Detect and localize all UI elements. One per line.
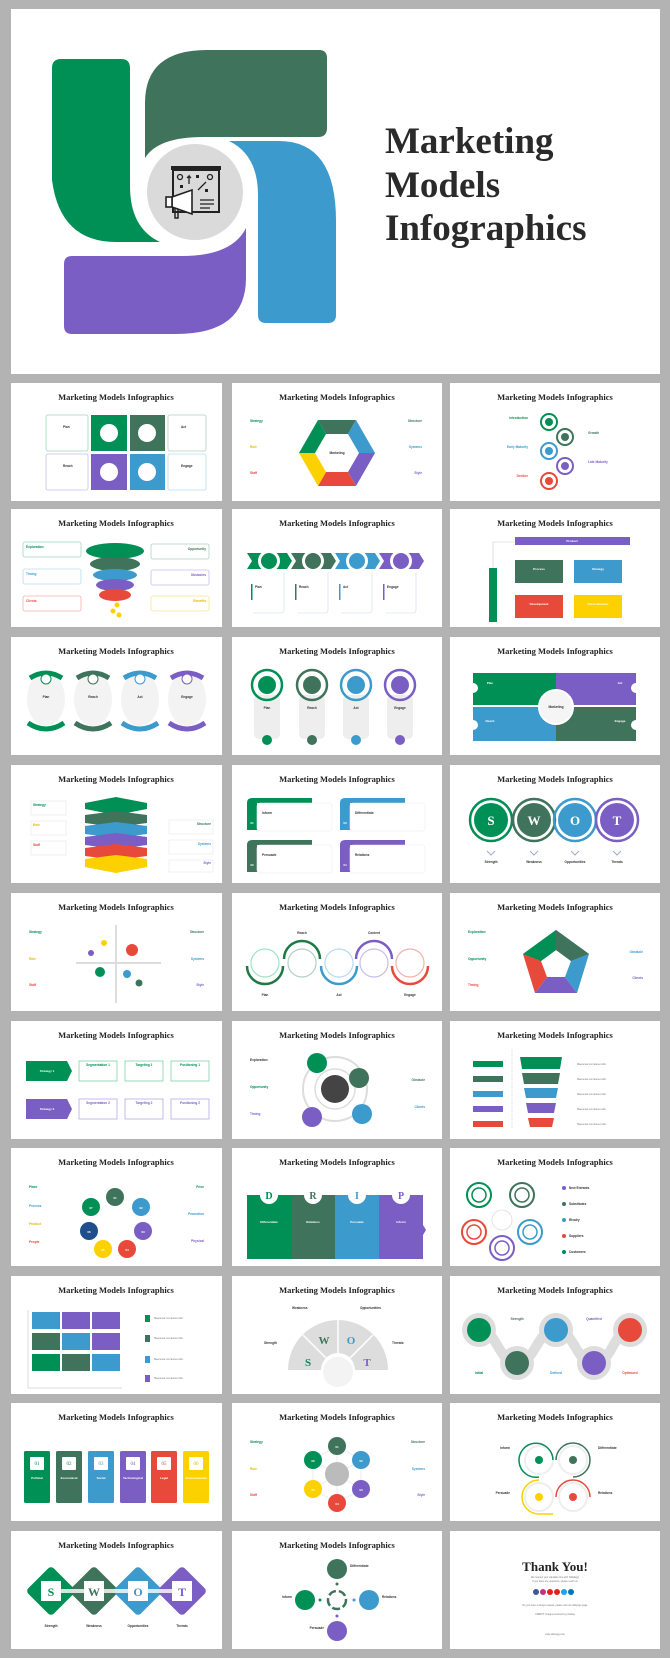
slide 22: grid matrix: Maecenas non laoreet odio. <box>154 1337 184 1340</box>
slide 4: funnel: Clients <box>26 599 37 603</box>
slide 8: circle columns: Act <box>353 706 360 710</box>
slide 26: hexagon circles: 01 <box>335 1445 339 1449</box>
slide 25: PESTLE cards: 01 <box>34 1462 40 1467</box>
slide 26: hexagon circles: Strategy <box>250 1440 263 1444</box>
slide 19: seven step cycle: 07 <box>89 1206 93 1210</box>
slide 18: funnel bars: Marketing Models Infographics <box>497 1030 614 1040</box>
slide 7: oval stages: Act <box>137 695 144 699</box>
slide 6: product matrix: Product <box>566 539 578 543</box>
slide 3: life cycle rings: Growth <box>588 431 599 435</box>
slide 7: oval stages <box>11 637 222 755</box>
slide 13: scatter quadrant: Structure <box>190 930 204 934</box>
slide 2: hexagon ring: Marketing <box>329 451 345 455</box>
slide 14: wave circles <box>232 893 442 1011</box>
slide 22: grid matrix: Marketing Models Infographics <box>58 1285 175 1295</box>
slide 9: puzzle quadrants: Reach <box>485 719 495 723</box>
slide 12: SWOT circles <box>450 765 660 883</box>
slide 12: SWOT circles: O <box>570 813 580 828</box>
slide 16: strategy flows: Marketing Models Infographics <box>58 1030 175 1040</box>
slide 17: orbit: Marketing Models Infographics <box>279 1030 396 1040</box>
slide 17: orbit: Obstacle <box>412 1078 425 1082</box>
slide 26: hexagon circles: 04 <box>335 1502 339 1506</box>
slide 25: PESTLE cards: 02 <box>66 1462 72 1467</box>
slide 7: oval stages: Plan <box>43 695 49 699</box>
slide 8: circle columns: Plan <box>264 706 270 710</box>
slide 9: puzzle quadrants <box>450 637 660 755</box>
slide 19: seven step cycle: People <box>29 1240 40 1244</box>
slide 12: SWOT circles: Threats <box>611 860 623 864</box>
slide 16: strategy flows: Positioning 1 <box>180 1063 200 1067</box>
slide 28: SWOT diamonds: Weakness <box>86 1624 102 1628</box>
slide 19: seven step cycle: 05 <box>101 1248 105 1252</box>
slide 5: chevron process: Reach <box>299 585 309 589</box>
slide 2: hexagon ring: Strategy <box>250 419 263 423</box>
slide 21: five forces rings <box>450 1148 660 1266</box>
slide 4: funnel: Marketing Models Infographics <box>58 518 175 528</box>
slide 2: hexagon ring: Role <box>250 445 257 449</box>
slide 23: SWOT half donut: S <box>305 1357 311 1369</box>
slide 1: puzzle: Plan <box>63 425 70 429</box>
slide 19: seven step cycle: Price <box>196 1185 204 1189</box>
slide 29: cross diagram <box>232 1531 442 1649</box>
slide 16: strategy flows: Strategy 2 <box>40 1107 55 1111</box>
slide 22: grid matrix: Maecenas non laoreet odio. <box>154 1317 184 1320</box>
slide 19: seven step cycle: Process <box>29 1204 42 1208</box>
slide 2: hexagon ring: Systems <box>409 445 422 449</box>
slide 18: funnel bars: Maecenas non laoreet odio. <box>577 1093 607 1096</box>
slide 28: SWOT diamonds: S <box>48 1585 55 1599</box>
slide 15: pentagon: Timing <box>468 983 478 987</box>
slide 13: scatter quadrant: Style <box>196 983 204 987</box>
slide 29: cross diagram: Marketing Models Infographics <box>279 1540 396 1550</box>
slide 30: thank you <box>450 1531 660 1649</box>
slide 17: orbit: Timing <box>250 1112 260 1116</box>
slide 28: SWOT diamonds <box>11 1531 222 1649</box>
slide 10: stacked layers: Strategy <box>33 803 46 807</box>
slide 10: stacked layers: Systems <box>198 842 211 846</box>
slide 4: funnel: Exploration <box>26 545 44 549</box>
slide 21: five forces rings: Marketing Models Infographics <box>497 1157 614 1167</box>
slide 30: thank you: If you have any questions, please reach us <box>532 1580 578 1583</box>
slide 23: SWOT half donut: Weakness <box>292 1306 308 1310</box>
slide 15: pentagon <box>450 893 660 1011</box>
slide 11: tab cards: 01 <box>250 821 254 825</box>
slide 1: puzzle: Engage <box>181 464 193 468</box>
slide 15: pentagon: Clients <box>632 976 643 980</box>
slide 11: tab cards: 04 <box>343 863 347 867</box>
slide 5: chevron process <box>232 509 442 627</box>
slide 27: four arc loops: Inform <box>500 1446 510 1450</box>
slide 27: four arc loops: Differentiate <box>598 1446 617 1450</box>
slide 11: tab cards: 02 <box>250 863 254 867</box>
slide 10: stacked layers: Staff <box>33 843 41 847</box>
slide 8: circle columns <box>232 637 442 755</box>
slide 13: scatter quadrant <box>11 893 222 1011</box>
slide 16: strategy flows <box>11 1021 222 1139</box>
slide 19: seven step cycle: 04 <box>125 1248 129 1252</box>
title: Marketing <box>385 121 554 162</box>
slide 9: puzzle quadrants: Marketing Models Infographics <box>497 646 614 656</box>
slide 24: winding path: Optimized <box>622 1371 638 1375</box>
slide 6: product matrix: Marketing Models Infographics <box>497 518 614 528</box>
slide 22: grid matrix: Maecenas non laoreet odio. <box>154 1358 184 1361</box>
slide 25: PESTLE cards <box>11 1403 222 1521</box>
slide 14: wave circles: Reach <box>297 931 307 935</box>
slide 9: puzzle quadrants: Marketing <box>548 705 564 709</box>
slide 16: strategy flows: Strategy 1 <box>40 1069 55 1073</box>
slide 20: DRIP columns: Relations <box>306 1220 320 1224</box>
slide 24: winding path: Strength <box>510 1317 524 1321</box>
slide 19: seven step cycle <box>11 1148 222 1266</box>
slide 28: SWOT diamonds: Strength <box>44 1624 58 1628</box>
slide 23: SWOT half donut: Threats <box>392 1341 404 1345</box>
slide 26: hexagon circles: 03 <box>359 1488 363 1492</box>
slide 5: chevron process: Engage <box>387 585 399 589</box>
slide 6: product matrix: Diversification <box>588 602 608 606</box>
slide 4: funnel <box>11 509 222 627</box>
slide 22: grid matrix <box>11 1276 222 1394</box>
slide 12: SWOT circles: Opportunities <box>565 860 586 864</box>
slide 30: thank you: Do you have a design request, please visit our slidesign page <box>522 1604 588 1607</box>
slide 18: funnel bars: Maecenas non laoreet odio. <box>577 1123 607 1126</box>
slide 28: SWOT diamonds: W <box>88 1585 100 1599</box>
slide 10: stacked layers: Style <box>203 861 211 865</box>
slide 23: SWOT half donut: W <box>318 1335 330 1347</box>
slide 26: hexagon circles: Staff <box>250 1493 258 1497</box>
slide 11: tab cards: Relations <box>355 853 370 857</box>
slide 3: life cycle rings <box>450 383 660 501</box>
slide 10: stacked layers: Role <box>33 823 40 827</box>
slide 19: seven step cycle: 01 <box>113 1196 117 1200</box>
slide 21: five forces rings: Suppliers <box>569 1234 584 1238</box>
slide 26: hexagon circles: Systems <box>412 1467 425 1471</box>
slide 13: scatter quadrant: Strategy <box>29 930 42 934</box>
slide 10: stacked layers: Structure <box>197 822 211 826</box>
slide 10: stacked layers: Marketing Models Infographics <box>58 774 175 784</box>
slide 19: seven step cycle: Physical <box>191 1239 204 1243</box>
slide 17: orbit: Exploration <box>250 1058 268 1062</box>
slide 15: pentagon: Obstacle <box>630 950 643 954</box>
slide 5: chevron process: Marketing Models Infographics <box>279 518 396 528</box>
slide 26: hexagon circles: Marketing Models Infographics <box>279 1412 396 1422</box>
slide 3: life cycle rings: Late Maturity <box>588 460 608 464</box>
slide 14: wave circles: Act <box>336 993 343 997</box>
slide 14: wave circles: Plan <box>262 993 268 997</box>
slide 29: cross diagram: Relations <box>382 1595 397 1599</box>
slide 12: SWOT circles: T <box>613 813 622 828</box>
slide 19: seven step cycle: 06 <box>87 1230 91 1234</box>
slide 26: hexagon circles: Style <box>417 1493 425 1497</box>
slide 20: DRIP columns: Marketing Models Infographics <box>279 1157 396 1167</box>
slide 20: DRIP columns: D <box>265 1191 273 1202</box>
slide 25: PESTLE cards: Marketing Models Infographics <box>58 1412 175 1422</box>
slide 16: strategy flows: Segmentation 2 <box>86 1101 110 1105</box>
slide 2: hexagon ring: Marketing Models Infographics <box>279 392 396 402</box>
slide 24: winding path <box>450 1276 660 1394</box>
slide 3: life cycle rings: Early Maturity <box>507 445 528 449</box>
slide 5: chevron process: Plan <box>255 585 262 589</box>
slide 19: seven step cycle: Product <box>29 1222 42 1226</box>
slide 21: five forces rings: New Entrants <box>569 1186 590 1190</box>
slide 18: funnel bars <box>450 1021 660 1139</box>
slide 2: hexagon ring: Structure <box>408 419 422 423</box>
slide 11: tab cards: 03 <box>343 821 347 825</box>
panel: cover slide <box>11 9 660 374</box>
slide 3: life cycle rings: Introduction <box>509 416 528 420</box>
slide 29: cross diagram: Inform <box>282 1595 292 1599</box>
slide 11: tab cards: Persuade <box>262 853 277 857</box>
slide 1: puzzle: Marketing Models Infographics <box>58 392 175 402</box>
slide 25: PESTLE cards: 05 <box>162 1462 167 1467</box>
slide 21: five forces rings: Rivalry <box>569 1218 580 1222</box>
slide 2: hexagon ring: Staff <box>250 471 258 475</box>
slide 23: SWOT half donut: O <box>347 1335 356 1347</box>
slide 19: seven step cycle: Marketing Models Infographics <box>58 1157 175 1167</box>
slide 11: tab cards: Inform <box>262 811 272 815</box>
panel: cover slide: Models <box>385 165 500 206</box>
slide 27: four arc loops <box>450 1403 660 1521</box>
slide 25: PESTLE cards: Legal <box>160 1476 168 1480</box>
slide 22: grid matrix: Maecenas non laoreet odio. <box>154 1377 184 1380</box>
slide 4: funnel: Benefits <box>193 599 206 603</box>
slide 12: SWOT circles: Marketing Models Infographics <box>497 774 614 784</box>
slide 29: cross diagram: Persuade <box>310 1626 324 1630</box>
slide 11: tab cards <box>232 765 442 883</box>
slide 25: PESTLE cards: Technological <box>123 1476 143 1480</box>
slide 28: SWOT diamonds: Threats <box>176 1624 188 1628</box>
slide 14: wave circles: Marketing Models Infographics <box>279 902 396 912</box>
slide 25: PESTLE cards: Economical <box>61 1476 78 1480</box>
slide 19: seven step cycle: Promotion <box>188 1212 204 1216</box>
slide 10: stacked layers <box>11 765 222 883</box>
slide 3: life cycle rings: Marketing Models Infographics <box>497 392 614 402</box>
slide 20: DRIP columns: Inform <box>396 1220 406 1224</box>
slide 21: five forces rings: Customers <box>569 1250 586 1254</box>
slide 24: winding path: Defined <box>550 1371 562 1375</box>
slide 20: DRIP columns: Differentiate <box>260 1220 278 1224</box>
slide 29: cross diagram: Differentiate <box>350 1564 369 1568</box>
slide 12: SWOT circles: Weakness <box>526 860 542 864</box>
slide 26: hexagon circles <box>232 1403 442 1521</box>
slide 20: DRIP columns: I <box>355 1191 359 1202</box>
slide 26: hexagon circles: Structure <box>411 1440 425 1444</box>
slide 3: life cycle rings: Decline <box>517 474 528 478</box>
slide 27: four arc loops: Persuade <box>496 1491 510 1495</box>
slide 30: thank you: Thank You! <box>522 1559 588 1574</box>
slide 6: product matrix: Process <box>533 567 545 571</box>
slide 25: PESTLE cards: Environmental <box>186 1476 207 1480</box>
slide 28: SWOT diamonds: Opportunities <box>128 1624 149 1628</box>
slide 26: hexagon circles: Role <box>250 1467 257 1471</box>
slide 27: four arc loops: Relations <box>598 1491 613 1495</box>
logo: four colored leaves <box>52 50 336 334</box>
slide 4: funnel: Obstacles <box>191 573 206 577</box>
slide 23: SWOT half donut: Opportunities <box>360 1306 381 1310</box>
slide 4: funnel: Opportunity <box>188 547 206 551</box>
slide 11: tab cards: Marketing Models Infographics <box>279 774 396 784</box>
slide 17: orbit <box>232 1021 442 1139</box>
slide 15: pentagon: Exploration <box>468 930 486 934</box>
slide 23: SWOT half donut: Strength <box>264 1341 277 1345</box>
slide 28: SWOT diamonds: O <box>133 1585 143 1599</box>
slide 6: product matrix <box>450 509 660 627</box>
slide 19: seven step cycle: 02 <box>139 1206 143 1210</box>
slide 15: pentagon: Opportunity <box>468 957 486 961</box>
slide 18: funnel bars: Maecenas non laoreet odio. <box>577 1063 607 1066</box>
slide 24: winding path: Initial <box>475 1371 483 1375</box>
slide 9: puzzle quadrants: Plan <box>487 681 493 685</box>
slide 7: oval stages: Engage <box>181 695 193 699</box>
slide 15: pentagon: Marketing Models Infographics <box>497 902 614 912</box>
slide 6: product matrix: Development <box>530 602 548 606</box>
slide 25: PESTLE cards: Political <box>31 1476 43 1480</box>
slide 25: PESTLE cards: 06 <box>194 1462 199 1467</box>
slide 20: DRIP columns: Persuade <box>350 1220 364 1224</box>
slide 17: orbit: Opportunity <box>250 1085 268 1089</box>
slide 16: strategy flows: Segmentation 1 <box>86 1063 110 1067</box>
slide 1: puzzle: Reach <box>63 464 73 468</box>
slide 21: five forces rings: Substitutes <box>569 1202 587 1206</box>
slide 28: SWOT diamonds: Marketing Models Infographics <box>58 1540 175 1550</box>
slide 1: puzzle <box>11 383 222 501</box>
slide 12: SWOT circles: S <box>487 813 495 828</box>
slide 14: wave circles: Engage <box>404 993 416 997</box>
slide 23: SWOT half donut: T <box>363 1357 371 1369</box>
slide 28: SWOT diamonds: T <box>178 1585 186 1599</box>
slide 8: circle columns: Reach <box>307 706 317 710</box>
slide 4: funnel: Timing <box>26 572 36 576</box>
slide 30: thank you: www.slideegg.com <box>545 1633 565 1636</box>
slide 16: strategy flows: Targeting 1 <box>136 1063 153 1067</box>
slide 11: tab cards: Differentiate <box>355 811 374 815</box>
slide 7: oval stages: Reach <box>88 695 98 699</box>
slide 18: funnel bars: Maecenas non laoreet odio. <box>577 1078 607 1081</box>
slide 16: strategy flows: Targeting 2 <box>136 1101 153 1105</box>
slide 2: hexagon ring <box>232 383 442 501</box>
slide 30: thank you: CREDIT: Images powered by pixabay <box>535 1613 576 1616</box>
slide 17: orbit: Clients <box>414 1105 425 1109</box>
slide 24: winding path: Marketing Models Infographics <box>497 1285 614 1295</box>
slide 19: seven step cycle: 03 <box>141 1230 145 1234</box>
slide 13: scatter quadrant: Marketing Models Infographics <box>58 902 175 912</box>
slide 18: funnel bars: Maecenas non laoreet odio. <box>577 1108 607 1111</box>
slide 25: PESTLE cards: 04 <box>130 1462 136 1467</box>
slide 26: hexagon circles: 06 <box>311 1459 315 1463</box>
slide 20: DRIP columns <box>232 1148 442 1266</box>
slide 12: SWOT circles: W <box>528 813 540 828</box>
slide 5: chevron process: Act <box>343 585 349 589</box>
slide 26: hexagon circles: 02 <box>359 1459 363 1463</box>
slide 24: winding path: Quantified <box>586 1317 602 1321</box>
slide 26: hexagon circles: 05 <box>311 1488 315 1492</box>
slide 9: puzzle quadrants: Engage <box>615 719 626 723</box>
panel: cover slide: Infographics <box>385 208 586 249</box>
slide 23: SWOT half donut: Marketing Models Infographics <box>279 1285 396 1295</box>
slide 19: seven step cycle: Place <box>29 1185 38 1189</box>
slide 27: four arc loops: Marketing Models Infographics <box>497 1412 614 1422</box>
icon: marketing board in circle <box>147 144 243 240</box>
slide 23: SWOT half donut <box>232 1276 442 1394</box>
slide 20: DRIP columns: P <box>398 1191 404 1202</box>
slide 9: puzzle quadrants: Act <box>618 681 622 685</box>
slide 13: scatter quadrant: Systems <box>191 957 204 961</box>
slide 12: SWOT circles: Strength <box>484 860 498 864</box>
slide 16: strategy flows: Positioning 2 <box>180 1101 200 1105</box>
slide 8: circle columns: Marketing Models Infographics <box>279 646 396 656</box>
slide 25: PESTLE cards: Social <box>97 1476 106 1480</box>
slide 13: scatter quadrant: Role <box>29 957 36 961</box>
slide 2: hexagon ring: Style <box>414 471 422 475</box>
slide 8: circle columns: Engage <box>394 706 406 710</box>
slide 30: thank you: We respect your valuable time with SlideEgg! <box>531 1576 579 1579</box>
slide 6: product matrix: Strategy <box>592 567 604 571</box>
slide 1: puzzle: Act <box>181 425 187 429</box>
slide 13: scatter quadrant: Staff <box>29 983 37 987</box>
slide 14: wave circles: Content <box>368 931 381 935</box>
slide 20: DRIP columns: R <box>309 1191 317 1202</box>
slide 25: PESTLE cards: 03 <box>98 1462 104 1467</box>
slide 7: oval stages: Marketing Models Infographics <box>58 646 175 656</box>
